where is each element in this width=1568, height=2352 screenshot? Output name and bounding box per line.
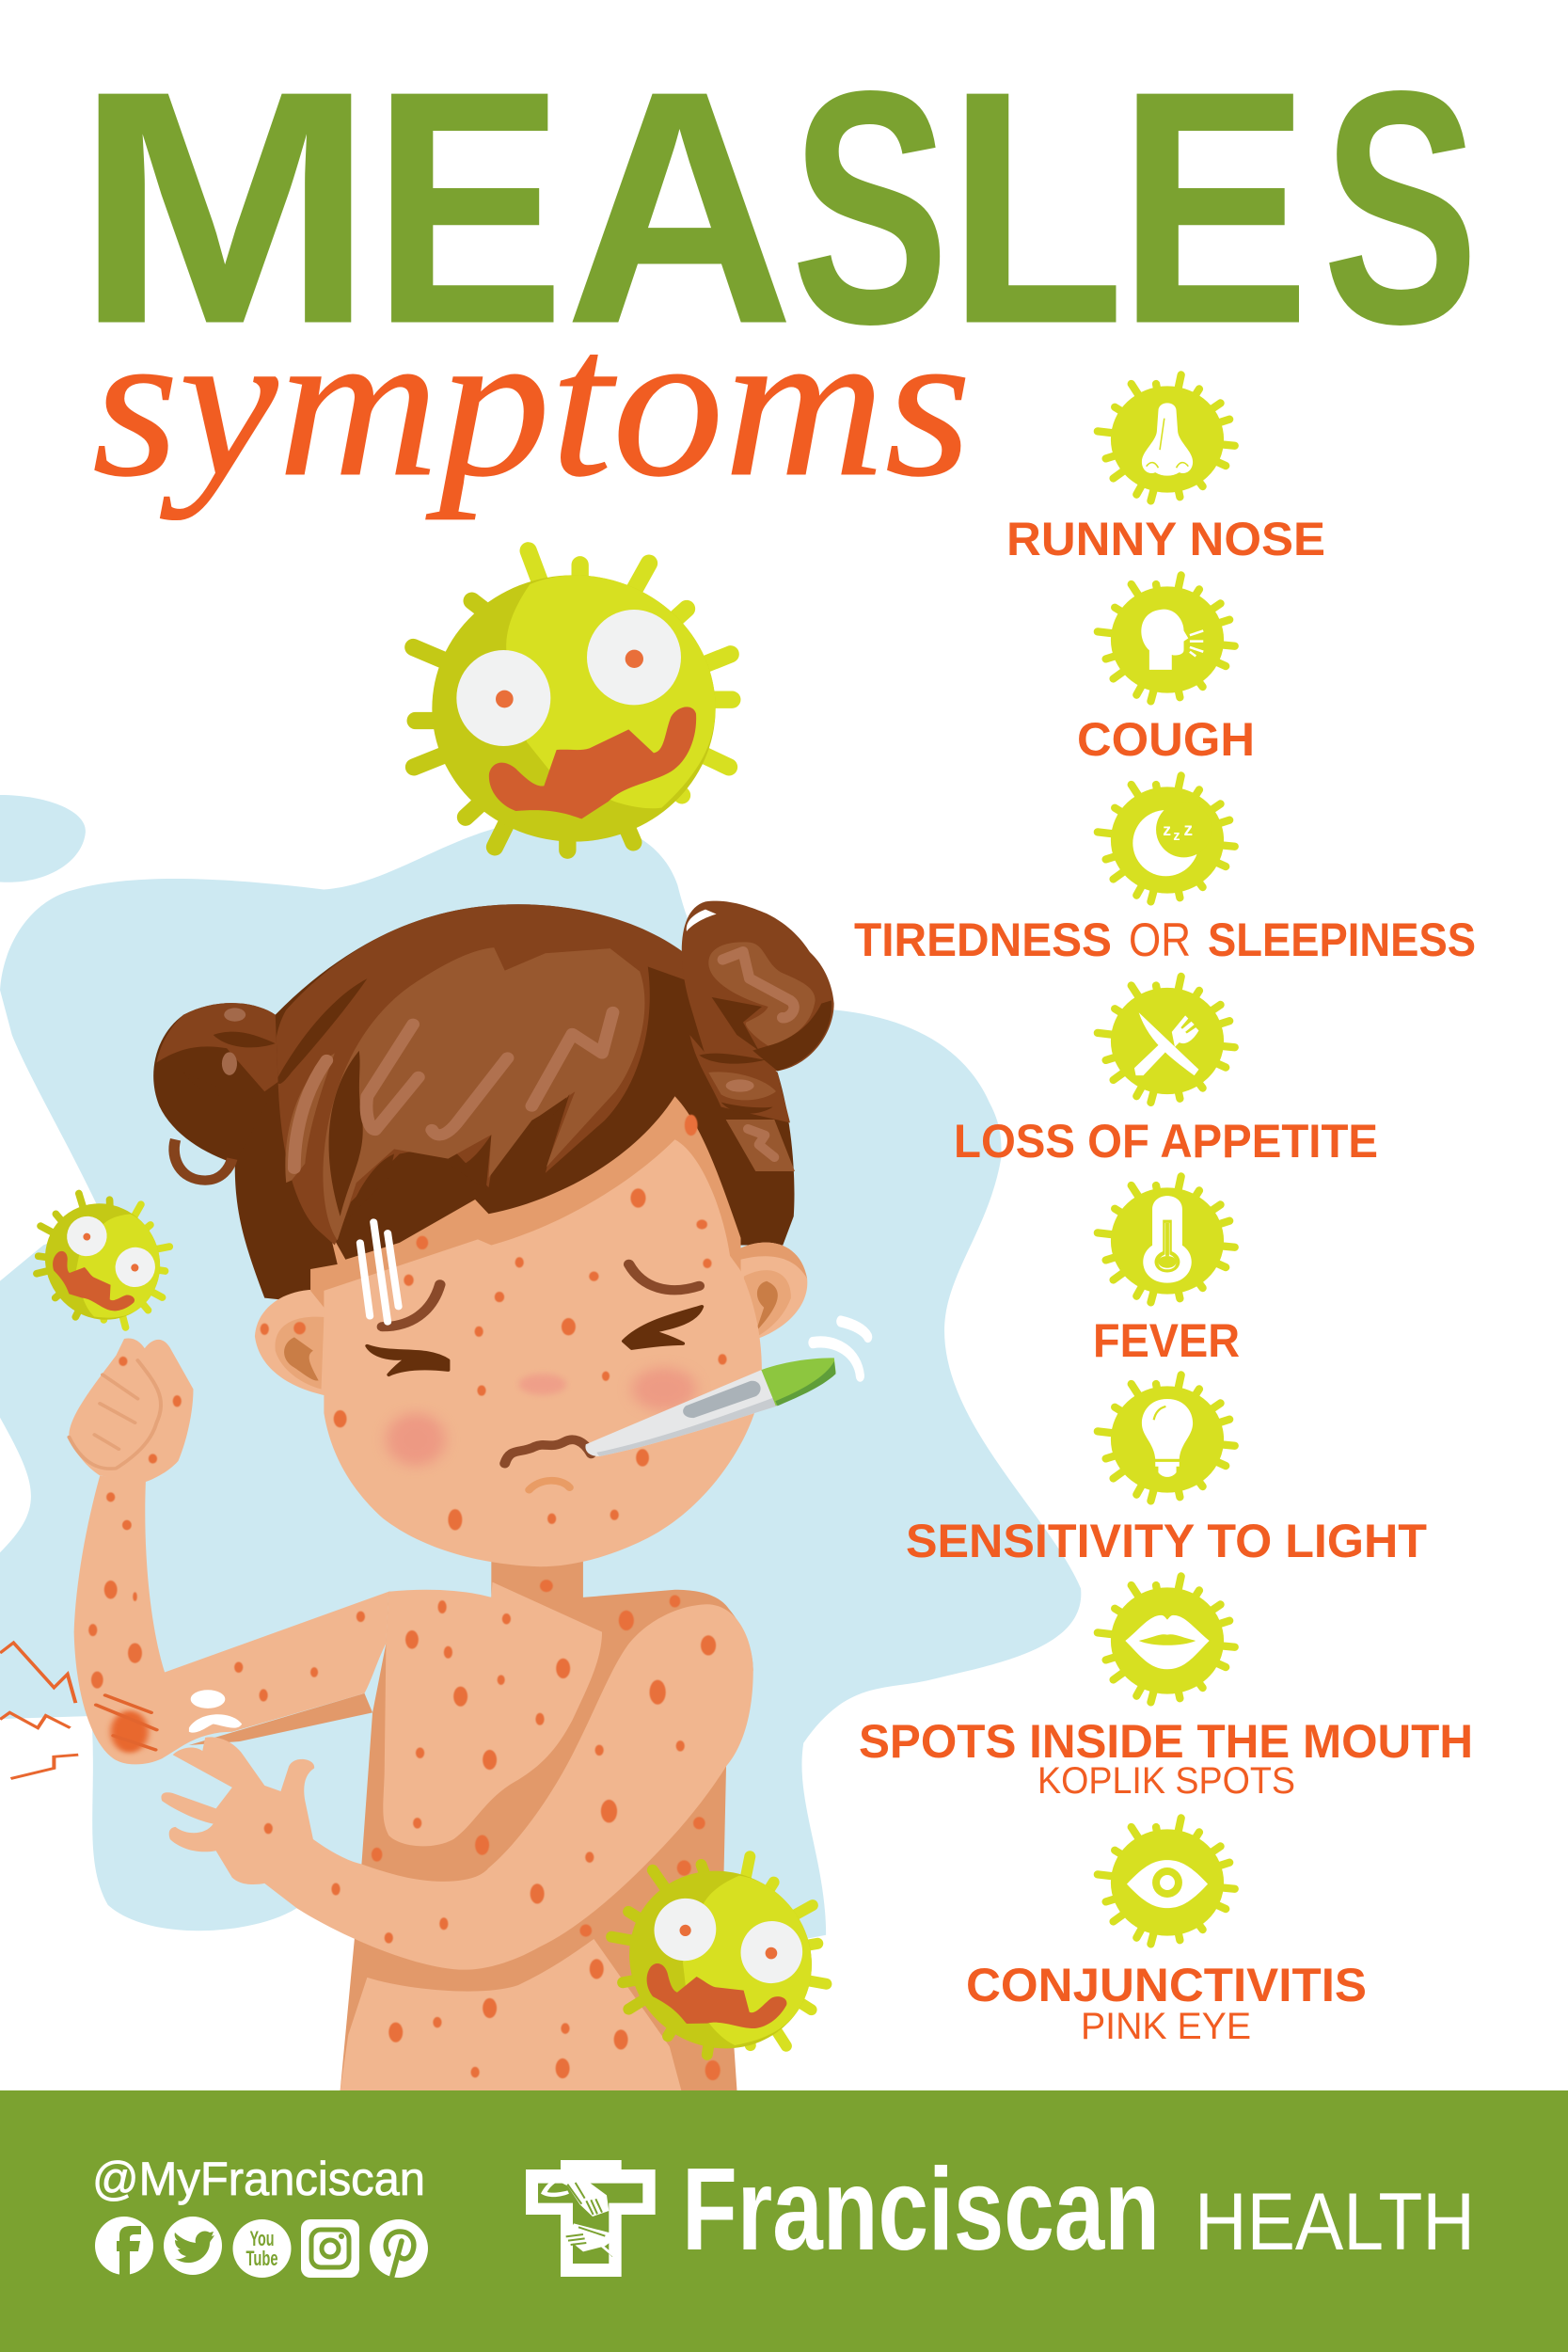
left ear (255, 1290, 335, 1396)
icon: youtube (233, 2219, 292, 2278)
symptom: sensitivity to light (906, 1375, 1427, 1567)
label: SLEEPINESS (1208, 914, 1476, 966)
cheeks and nose blush (386, 1368, 696, 1466)
subtitle: symptoms: symptoms (92, 285, 972, 520)
left hair bun (153, 1003, 278, 1181)
icon: youtube: Tube (246, 2247, 278, 2270)
elbow pain (96, 1695, 156, 1753)
blue background blob (0, 795, 1081, 1950)
symptom: tiredness or sleepiness (854, 775, 1476, 966)
mouth and chin (505, 1439, 592, 1490)
label: KOPLIK SPOTS (1037, 1760, 1295, 1802)
logo: Franciscan cross (526, 2160, 656, 2277)
face shadow band (310, 1096, 741, 1308)
icon: pinterest (370, 2219, 428, 2278)
virus: bottom right (582, 1817, 863, 2093)
footer band (0, 2090, 1568, 2352)
symptom: loss of appetite (954, 977, 1378, 1168)
symptom: fever (1093, 1176, 1240, 1367)
torso and arms (0, 1476, 753, 2090)
label (859, 1715, 1473, 1802)
hair light strip left (285, 1053, 335, 1183)
icon: thermometer (1098, 1176, 1235, 1302)
symptom: conjunctivitis (966, 1818, 1367, 2047)
label: LOSS OF APPETITE (954, 1115, 1378, 1168)
symptom: runny nose (1006, 374, 1325, 565)
label: SENSITIVITY TO LIGHT (906, 1515, 1427, 1567)
label (854, 914, 1476, 966)
icon: coughing head (1098, 575, 1235, 701)
label: RUNNY NOSE (1006, 513, 1325, 565)
label: COUGH (1077, 713, 1255, 766)
icon: youtube: You (250, 2227, 275, 2250)
icon: light bulb (1098, 1375, 1235, 1501)
logo wordmark: Franciscan (682, 2145, 1160, 2275)
pain lightning lines (0, 1643, 78, 1778)
right eyebrow and eye (624, 1264, 702, 1348)
social handle: @MyFranciscan (92, 2153, 425, 2205)
title: MEASLES: S (791, 21, 949, 393)
spots on face (106, 1115, 727, 1531)
label: SPOTS INSIDE THE MOUTH (859, 1715, 1473, 1768)
left eyebrow and eye (367, 1284, 448, 1375)
face (324, 1139, 762, 1566)
thermometer motion lines (813, 1321, 868, 1376)
girl illustration (0, 901, 868, 2090)
label: OR (1129, 914, 1191, 966)
title: MEASLES: E (1117, 21, 1310, 393)
label (966, 1959, 1367, 2047)
right hair bun (682, 901, 834, 1171)
title: MEASLES: E (372, 21, 564, 393)
icon: facebook (95, 2217, 153, 2276)
title: MEASLES: L (947, 21, 1125, 393)
icon: moon: z (1173, 829, 1180, 844)
hair dark wedge (277, 978, 367, 1084)
title: MEASLES: A (564, 21, 795, 393)
hair mid layer (275, 904, 702, 1245)
scratch marks (189, 1690, 242, 1733)
thermometer (585, 1358, 836, 1456)
symptom: spots inside the mouth (859, 1576, 1473, 1802)
title: MEASLES: S (1323, 21, 1479, 393)
icon: instagram (301, 2219, 359, 2278)
icon: nose (1098, 374, 1235, 501)
icon: moon: z (1184, 820, 1193, 840)
logo wordmark: HEALTH (1195, 2177, 1475, 2267)
label: CONJUNCTIVITIS (966, 1959, 1367, 2011)
forehead motion lines (360, 1222, 399, 1322)
virus: small left (13, 1168, 196, 1351)
label: FEVER (1093, 1314, 1240, 1367)
symptom: cough (1077, 575, 1255, 766)
hair highlights (294, 1012, 612, 1168)
label: PINK EYE (1081, 2006, 1251, 2047)
virus: large top (413, 550, 732, 850)
head and fist (69, 904, 836, 1566)
icon: lips (1098, 1576, 1235, 1702)
label: TIREDNESS (854, 914, 1112, 966)
raised fist (69, 1338, 193, 1483)
icon: knife and fork (1098, 977, 1235, 1103)
hair back (235, 904, 794, 1327)
icon: eye (1098, 1818, 1235, 1944)
hair shade spikes (329, 1051, 570, 1221)
right ear (729, 1243, 807, 1342)
icon: twitter (164, 2217, 222, 2275)
title: MEASLES: M (74, 21, 375, 393)
icon: moon (1098, 775, 1235, 901)
body rash spots (88, 1520, 721, 2080)
icon: moon: z (1163, 820, 1171, 839)
hair light cap (323, 947, 644, 1240)
